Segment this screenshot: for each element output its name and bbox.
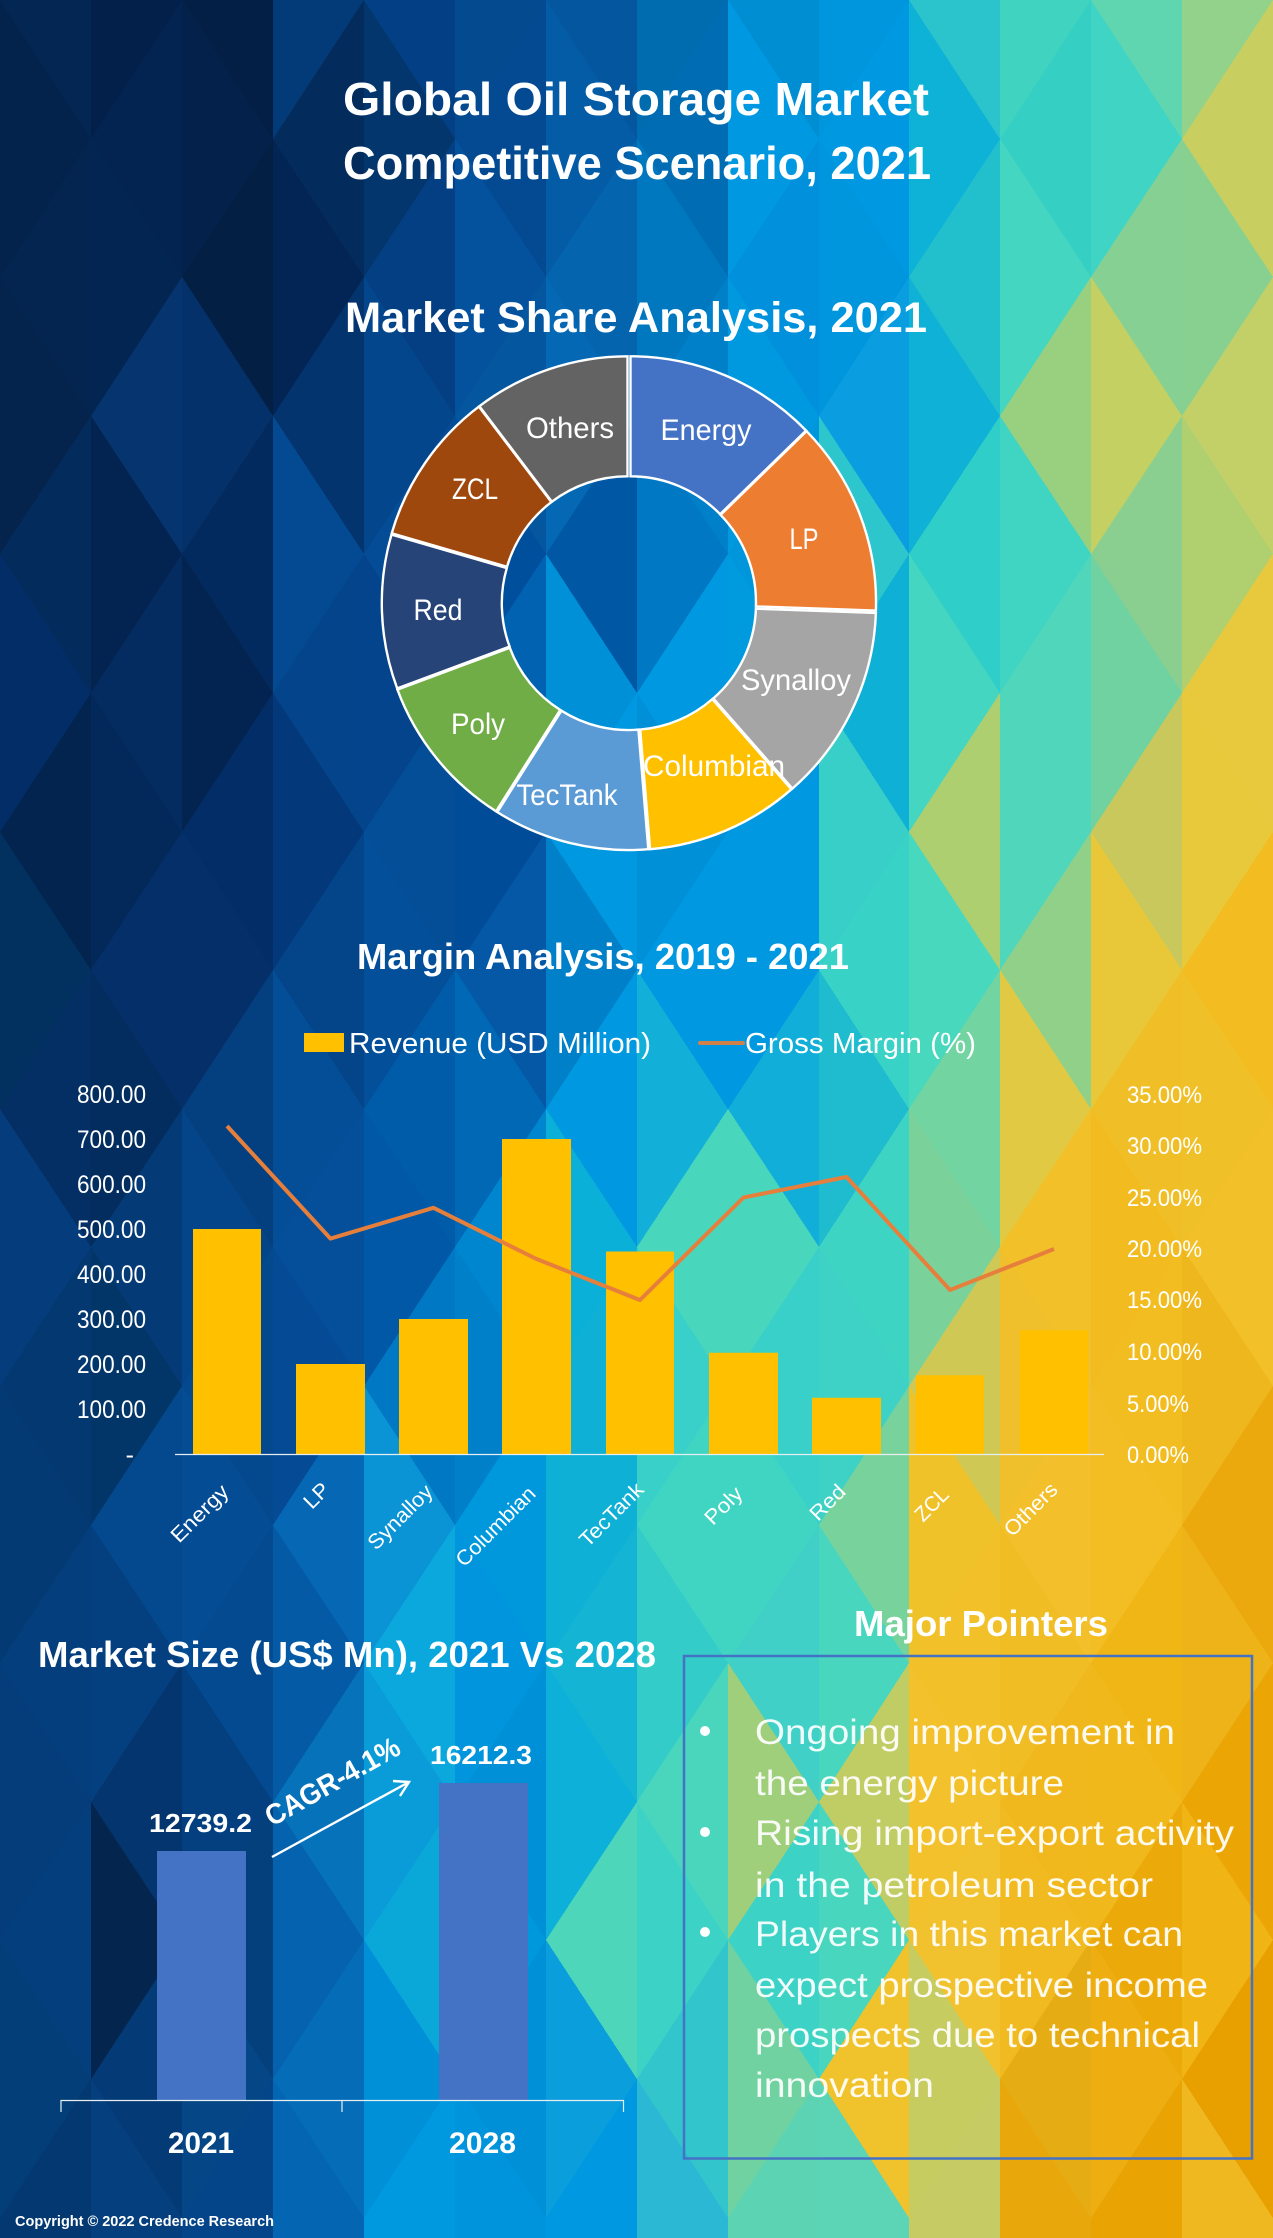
pointers text: prospects due to technical	[755, 2016, 1200, 2055]
donut labels: Poly	[451, 708, 505, 741]
bar chart: market size: 16212.3	[430, 1740, 532, 1770]
slice: Synalloy	[713, 609, 876, 789]
left axis labels	[77, 1081, 146, 1469]
category axis labels: Red	[805, 1480, 851, 1526]
legend: Revenue (USD Million)	[349, 1028, 651, 1060]
title: Competitive Scenario, 2021	[343, 137, 931, 189]
left axis labels: 100.00	[77, 1396, 146, 1424]
panel: major pointers	[684, 1656, 1252, 2158]
left axis labels: 300.00	[77, 1306, 146, 1334]
donut labels: Energy	[660, 414, 752, 447]
slice: TecTank	[497, 711, 648, 850]
category axis labels: TecTank	[575, 1478, 649, 1552]
pointers text: the energy picture	[755, 1764, 1064, 1803]
bullets	[700, 1726, 710, 1937]
bar chart: revenue	[193, 1139, 1088, 1454]
left axis labels: 400.00	[77, 1261, 146, 1289]
donut labels: Columbian	[643, 750, 785, 783]
category axis labels: Poly	[700, 1482, 748, 1530]
heading: market share analysis: Market Share Analysis, 2021	[345, 294, 927, 342]
category axis labels: ZCL	[910, 1483, 954, 1526]
title: Global Oil Storage Market	[343, 73, 929, 125]
right axis labels: 30.00%	[1127, 1133, 1202, 1160]
donut labels: TecTank	[516, 779, 618, 812]
category axis labels: LP	[299, 1478, 335, 1514]
right axis labels: 25.00%	[1127, 1185, 1202, 1212]
slice: ZCL	[392, 407, 551, 567]
arrow: growth	[272, 1781, 409, 1857]
legend	[304, 1028, 976, 1060]
right axis labels: 35.00%	[1127, 1082, 1202, 1109]
pointers text: Ongoing improvement in	[755, 1713, 1175, 1752]
slice: Red	[382, 535, 510, 688]
slice: Energy	[630, 356, 806, 514]
category axis labels	[166, 1478, 1063, 1571]
pointers text: in the petroleum sector	[755, 1866, 1153, 1905]
bar chart: market size	[61, 1740, 624, 2160]
pointers text: Rising import-export activity	[755, 1814, 1235, 1853]
pointers text: expect prospective income	[755, 1966, 1208, 2005]
left axis labels: 500.00	[77, 1216, 146, 1244]
left axis labels: -	[126, 1441, 134, 1469]
heading: margin analysis: Margin Analysis, 2019 - 2021	[357, 936, 849, 977]
title	[343, 73, 931, 189]
donut labels: Synalloy	[741, 664, 851, 697]
pointers text: innovation	[755, 2066, 934, 2105]
category axis labels: Others	[1000, 1478, 1063, 1541]
bar chart: market size: 2021	[168, 2127, 234, 2160]
heading: market size: Market Size (US$ Mn), 2021 Vs 2028	[38, 1634, 656, 1675]
category axis labels: Energy	[166, 1480, 234, 1547]
left axis labels: 200.00	[77, 1351, 146, 1379]
left axis labels: 700.00	[77, 1126, 146, 1154]
left axis labels: 800.00	[77, 1081, 146, 1109]
right axis labels: 5.00%	[1127, 1391, 1189, 1418]
category axis labels: Columbian	[451, 1482, 541, 1571]
bar chart: market size: 2028	[449, 2127, 516, 2160]
pointers text: Players in this market can	[755, 1915, 1183, 1954]
slice: LP	[721, 431, 876, 611]
left axis labels: 600.00	[77, 1171, 146, 1199]
legend: Gross Margin (%)	[745, 1028, 976, 1060]
donut labels: ZCL	[452, 473, 498, 506]
pointers text	[755, 1713, 1235, 2105]
callout: CAGR: CAGR-4.1%	[260, 1731, 406, 1833]
right axis labels	[1127, 1082, 1202, 1469]
right axis labels: 15.00%	[1127, 1287, 1202, 1314]
donut labels: Others	[526, 412, 614, 445]
right axis labels: 20.00%	[1127, 1236, 1202, 1263]
donut labels	[414, 412, 851, 812]
slice: Columbian	[640, 699, 791, 849]
slice: Poly	[397, 648, 560, 811]
category axis labels: Synalloy	[363, 1480, 438, 1555]
heading: major pointers: Major Pointers	[854, 1603, 1108, 1644]
right axis labels: 0.00%	[1127, 1442, 1189, 1469]
donut chart: market share	[382, 356, 876, 850]
right axis labels: 10.00%	[1127, 1339, 1202, 1366]
slice: Others	[479, 356, 628, 502]
donut labels: Red	[414, 594, 462, 627]
donut labels: LP	[790, 523, 818, 556]
bar chart: market size: 12739.2	[149, 1808, 252, 1838]
copyright: Copyright © 2022 Credence Research	[15, 2214, 274, 2230]
line chart: gross margin	[227, 1126, 1054, 1300]
